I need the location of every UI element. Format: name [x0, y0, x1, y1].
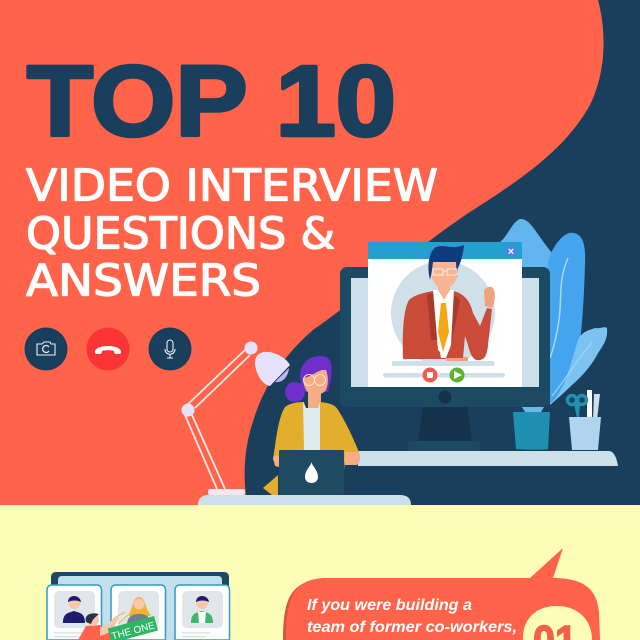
icon: microphone button — [148, 328, 192, 370]
interviewer figure — [403, 245, 495, 361]
candidate card 1 — [47, 585, 102, 640]
icon: close window: × — [508, 246, 514, 258]
icon: laptop logo — [305, 462, 318, 483]
question text: If you were building a — [307, 597, 472, 614]
panel: coral hero background — [0, 0, 640, 505]
candidate card 2 — [111, 585, 166, 640]
icon: scissors and pens in cup — [568, 390, 601, 450]
candidate card 3 — [175, 585, 230, 640]
panel: yellow background — [0, 505, 640, 640]
icon: camera button — [24, 328, 68, 370]
icon: teal cup — [513, 407, 550, 450]
desk right — [358, 451, 618, 466]
monitor — [340, 267, 550, 452]
number badge — [523, 606, 592, 640]
title: top 10: TOP 10 — [27, 46, 396, 158]
icon: stop button — [422, 368, 438, 382]
desk left — [198, 495, 411, 505]
figure holding sign — [78, 612, 158, 640]
icon: hang up button — [86, 328, 130, 370]
woman at laptop — [263, 356, 360, 495]
question text: team of former co-workers, — [307, 619, 517, 636]
video call window — [368, 242, 522, 387]
icon: blue plant — [500, 219, 607, 405]
question text — [307, 597, 517, 636]
heading: subtitle: QUESTIONS & — [26, 208, 335, 260]
icon: play button — [450, 368, 464, 382]
heading: subtitle: VIDEO INTERVIEW — [26, 160, 438, 212]
panel: candidate profile board — [47, 572, 230, 640]
speech bubble: question 01 — [283, 548, 600, 640]
heading: subtitle — [26, 160, 438, 306]
heading: subtitle: ANSWERS — [26, 256, 261, 306]
panel: dark navy wave — [245, 0, 640, 505]
icon: desk lamp — [182, 342, 290, 495]
